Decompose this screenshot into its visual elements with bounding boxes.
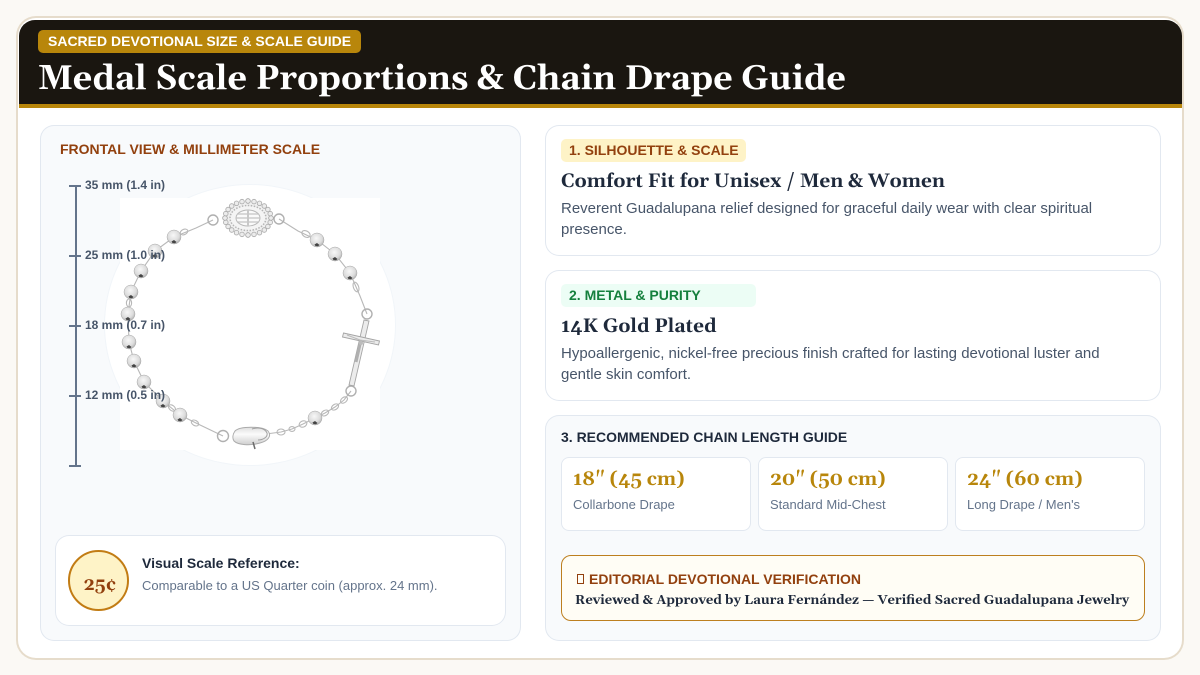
- option: 18 inch: 18" (45 cm): [573, 468, 685, 492]
- scale label: 12 mm: 12 mm (0.5 in): [85, 388, 165, 402]
- beads: [121, 230, 357, 425]
- verification heading: EDITORIAL DEVOTIONAL VERIFICATION: [589, 571, 861, 587]
- product photo backdrop: [105, 185, 395, 465]
- scale label: 35 mm: 35 mm (1.4 in): [85, 178, 165, 192]
- icon: US quarter coin: [68, 550, 129, 611]
- ruler axis: [75, 185, 77, 466]
- option: 24 inch: 24" (60 cm): [967, 468, 1083, 492]
- callout: editorial verification: [561, 555, 1145, 621]
- panel heading: frontal view: FRONTAL VIEW & MILLIMETER SCALE: [60, 141, 320, 157]
- tag: metal and purity: 2. METAL & PURITY: [569, 287, 701, 303]
- scale label: 25 mm: 25 mm (1.0 in): [85, 248, 165, 262]
- tag: silhouette and scale: 1. SILHOUETTE & SCALE: [569, 142, 739, 158]
- tag: metal and purity: [561, 284, 756, 307]
- coin comparison heading: Visual Scale Reference:: [142, 555, 300, 571]
- description: relief design: [561, 200, 1092, 238]
- description: relief design: Reverent Guadalupana relief designed for graceful daily wear with clear spiritual: [561, 200, 1092, 217]
- millimeter scale ruler: [75, 187, 77, 465]
- circular backdrop: [105, 185, 395, 465]
- coin comparison text: Comparable to a US Quarter coin (approx. 24 mm).: [142, 578, 438, 593]
- option: 20 inch: 20" (50 cm): [770, 468, 886, 492]
- badge: guide category: [38, 30, 361, 53]
- option: 18 inch: [561, 457, 751, 531]
- verification statement: Reviewed & Approved by Laura Fernández — Verified Sacred Guadalupana Jewelry: [575, 593, 1129, 609]
- description: finish: [561, 345, 1100, 383]
- option: 24 inch: [955, 457, 1145, 531]
- description: relief design: presence.: [561, 221, 627, 238]
- heading: 14K gold plated: 14K Gold Plated: [561, 315, 717, 339]
- heading: comfort fit: Comfort Fit for Unisex / Men & Women: [561, 170, 945, 194]
- tick: 18 mm: [69, 325, 81, 327]
- description: finish: gentle skin comfort.: [561, 366, 691, 383]
- card: visual scale reference: [55, 535, 506, 626]
- icon: missing-glyph box: [577, 574, 584, 584]
- tick: 25 mm: [69, 255, 81, 257]
- option: 24 inch: Long Drape / Men's: [967, 496, 1080, 512]
- icon: US quarter coin: 25¢: [84, 574, 116, 597]
- jump rings: [208, 214, 372, 442]
- cross: [342, 320, 380, 386]
- section heading: chain length: 3. RECOMMENDED CHAIN LENGTH GUIDE: [561, 429, 847, 445]
- tick: 35 mm: [69, 185, 81, 187]
- option: 18 inch: Collarbone Drape: [573, 496, 675, 512]
- chain: [126, 219, 367, 436]
- lobster clasp: [233, 427, 270, 449]
- scale label: 18 mm: 18 mm (0.7 in): [85, 318, 165, 332]
- title: Medal Scale Proportions & Chain Drape Guide: [38, 57, 846, 101]
- description: finish: Hypoallergenic, nickel-free precious finish crafted for lasting devotional luster and: [561, 345, 1100, 362]
- medal: [223, 199, 273, 237]
- square photo background: [120, 198, 380, 450]
- tick: 12 mm: [69, 395, 81, 397]
- panel: frontal view and millimeter scale: [40, 125, 521, 641]
- card: metal and purity: [545, 270, 1161, 401]
- option: 20 inch: Standard Mid-Chest: [770, 496, 886, 512]
- tag: silhouette and scale: [561, 139, 746, 162]
- badge: guide category: SACRED DEVOTIONAL SIZE & SCALE GUIDE: [48, 33, 351, 49]
- header band: [19, 20, 1182, 108]
- illustration: rosary bracelet with Guadalupe medal, cross and clasp: [120, 198, 380, 450]
- option: 20 inch: [758, 457, 948, 531]
- panel: recommended chain length guide: [545, 415, 1161, 641]
- card: silhouette and scale: [545, 125, 1161, 256]
- tick: scale base: [69, 465, 81, 467]
